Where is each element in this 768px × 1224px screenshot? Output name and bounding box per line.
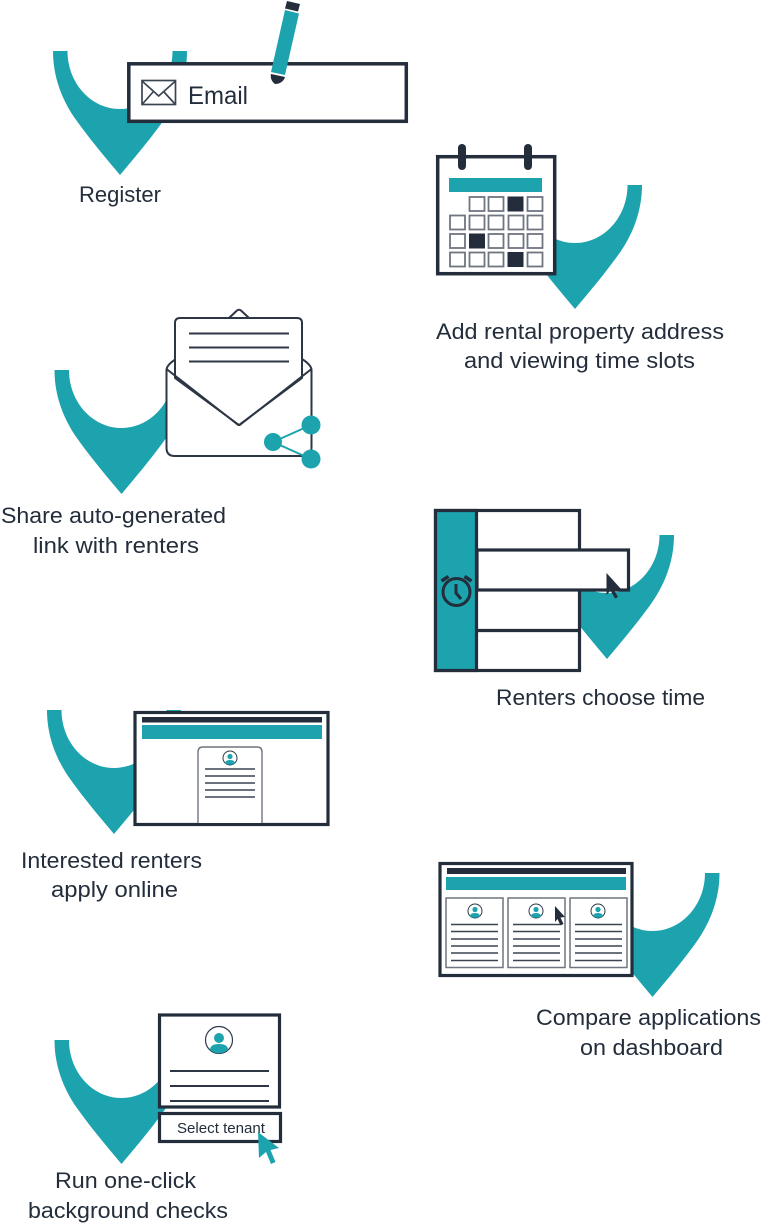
label: register: Register xyxy=(79,182,161,207)
dashboard window xyxy=(440,864,632,976)
label: background checks: background checks xyxy=(28,1198,228,1223)
icon: envelope xyxy=(142,80,176,104)
application document xyxy=(198,747,262,823)
time slot table xyxy=(436,510,628,670)
icon: share nodes xyxy=(264,416,320,468)
step 4: renters choose time xyxy=(436,510,705,710)
label: apply online xyxy=(21,848,202,902)
label: share link: link with renters xyxy=(33,533,199,558)
step 2: add property xyxy=(436,144,724,373)
label: add rental property xyxy=(436,319,724,373)
icon: cursor xyxy=(555,906,565,926)
pin marker 1 xyxy=(53,51,187,175)
label: add rental property: and viewing time slots xyxy=(464,348,695,373)
icon: pencil xyxy=(271,1,300,84)
icon: open envelope with letter xyxy=(166,310,312,456)
step 3: share link xyxy=(1,310,320,558)
label: share link: Share auto-generated xyxy=(1,503,226,528)
pin marker 3 xyxy=(54,370,188,494)
icon: teal cursor xyxy=(258,1132,279,1164)
icon: calendar xyxy=(438,144,555,274)
icon: alarm clock xyxy=(442,576,472,606)
label: apply online: apply online xyxy=(51,877,178,902)
label: compare applications: Compare applications xyxy=(536,1005,761,1030)
select tenant button xyxy=(160,1114,280,1142)
step 5: apply online xyxy=(21,710,328,902)
label: renters choose time: Renters choose time xyxy=(496,685,705,710)
email input box xyxy=(129,64,406,121)
email label: Email xyxy=(188,82,248,110)
pin marker 7 xyxy=(54,1040,188,1164)
pin marker 4 xyxy=(540,535,674,659)
label: compare applications: on dashboard xyxy=(580,1035,723,1060)
label: apply online: Interested renters xyxy=(21,848,202,873)
select tenant button: Select tenant xyxy=(177,1121,265,1137)
label: background checks: Run one-click xyxy=(55,1168,197,1193)
label: compare applications xyxy=(536,1005,761,1060)
tenant profile card xyxy=(160,1015,280,1107)
pin marker 5 xyxy=(47,710,181,834)
browser window xyxy=(135,712,328,824)
step 1: register xyxy=(53,1,406,207)
pin marker 2 xyxy=(508,185,642,309)
step 7: background checks xyxy=(28,1015,280,1223)
label: share link xyxy=(1,503,226,558)
pin marker 6 xyxy=(586,873,720,997)
label: add rental property: Add rental property address xyxy=(436,319,724,344)
label: background checks xyxy=(28,1168,228,1223)
icon: cursor xyxy=(606,573,621,598)
step 6: compare on dashboard xyxy=(440,864,761,1060)
